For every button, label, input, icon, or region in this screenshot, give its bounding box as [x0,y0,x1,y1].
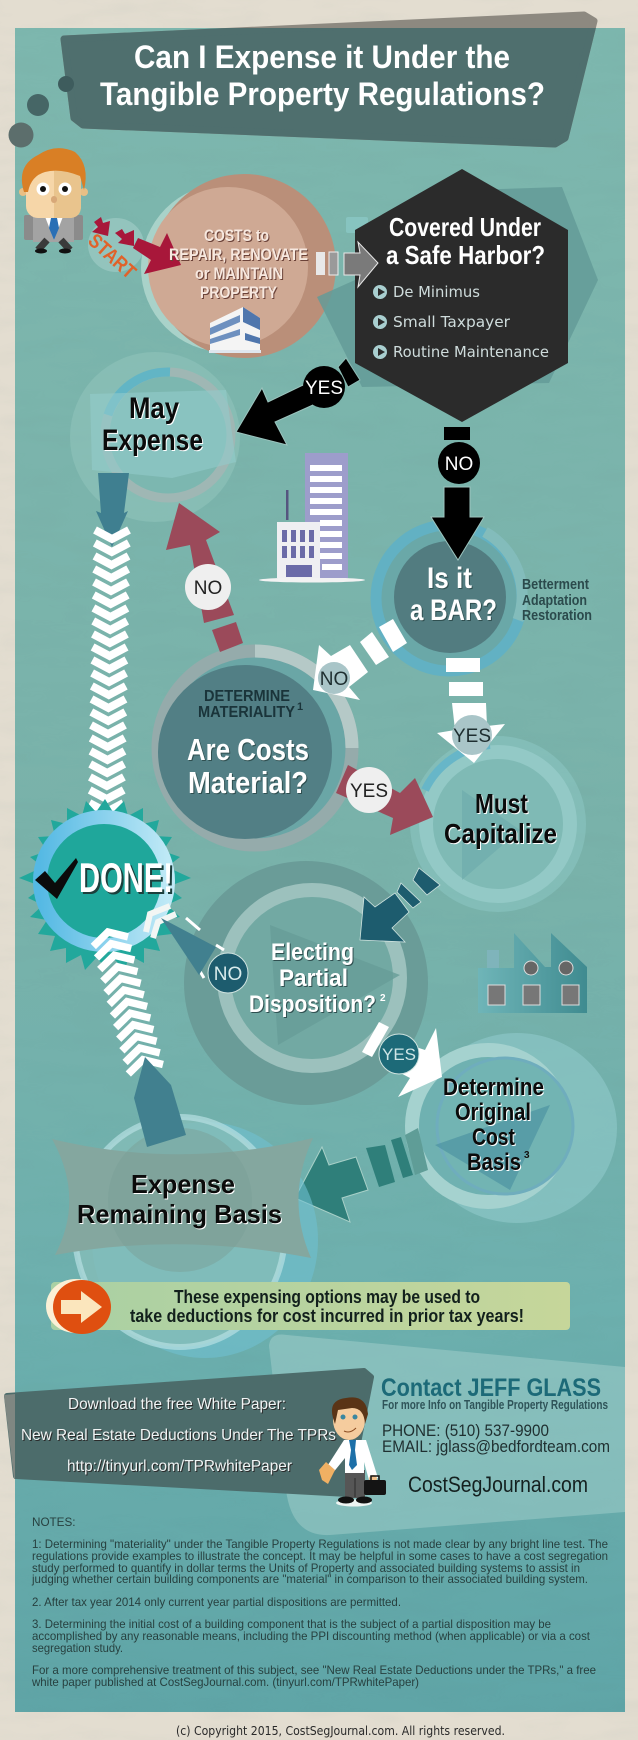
arrow: no from BAR to materiality [313,619,407,700]
arrow: yes from materiality to must capitalize [336,765,433,835]
arrow: no from BAR to materiality: NO [320,669,348,690]
character: businessman [19,148,88,254]
panel: materiality circle: 1 [297,701,303,713]
text: costs to repair [169,226,308,302]
arrow: may expense down to done [89,473,129,812]
icon: factory [478,933,587,1013]
arrow: yes from electing to determine [362,1022,442,1097]
panel: safe harbor hexagon [317,169,598,422]
text block: notes: accomplished by any reasonable means, including the PPI discounting method (when applicable) or via a cost [32,1630,591,1643]
panel: safe harbor hexagon: Covered Under [389,212,541,242]
thought bubbles [8,76,74,148]
text: costs to repair: PROPERTY [200,283,278,302]
arrow: yes from BAR to must capitalize [437,658,505,763]
done badge [19,799,191,970]
text block: notes: study performed to quantify in dollar terms the Units of Property and associated building systems to assist in [32,1562,580,1575]
text: costs to repair: COSTS to [204,226,269,245]
panel: download white paper: Download the free White Paper: [68,1396,286,1413]
safe harbor list: Small Taxpayer [393,313,511,331]
arrow: yes to may expense: YES [305,378,343,399]
arrow: yes from materiality to must capitalize: YES [350,781,388,802]
character: contact man with briefcase [319,1397,386,1506]
panel: electing partial disposition circle: Disposition? [249,991,376,1018]
arrow: expense remaining basis up to done [93,932,186,1147]
panel: download white paper: http://tinyurl.com/TPRwhitePaper [67,1458,293,1475]
panel: may expense circle: May [129,392,179,425]
safe harbor list: De Minimus [393,283,480,301]
panel: costs circle [141,174,336,358]
arrow: no from electing to done [146,906,248,993]
contact details: PHONE: (510) 537-9900 [382,1422,549,1440]
panel: expense remaining basis [52,1117,318,1358]
BAR definition list: Adaptation [522,592,587,609]
arrow: determine to expense remaining basis [295,1128,428,1222]
panel: expense remaining basis: Expense [131,1169,235,1199]
text block: notes: white paper published at CostSegJournal.com. (tinyurl.com/TPRwhitePaper) [31,1676,419,1689]
text block: notes: NOTES: [32,1516,76,1529]
panel: may expense circle: Expense [102,424,203,457]
title banner: Can I Expense it Under the [134,39,510,75]
panel: materiality circle [158,651,352,845]
panel: download white paper: New Real Estate Deductions Under The TPRs [21,1427,336,1444]
text block: notes: 2. After tax year 2014 only current year partial dispositions are permitted. [32,1596,401,1609]
BAR definition list: Betterment [522,576,589,593]
safe harbor list [373,283,549,361]
text block: notes: regulations provide examples to illustrate the concept. It may be helpful in some cases to have a cost segregation [32,1550,608,1563]
panel: determine original cost basis circle: Basis [467,1149,521,1176]
title banner [64,15,594,144]
text block: notes: For a more comprehensive treatment of this subject, see "New Real Estate Deductions under the TPRs," a free [32,1664,596,1677]
title banner: Tangible Property Regulations? [100,76,545,112]
text: costs to repair: REPAIR, RENOVATE [169,245,308,264]
contact details: EMAIL: jglass@bedfordteam.com [382,1438,610,1456]
panel: must capitalize circle [410,736,586,912]
icon: check mark [35,858,78,899]
panel: determine original cost basis circle [412,1033,617,1223]
panel: determine original cost basis circle: Determine [443,1074,544,1101]
panel: download white paper [4,1371,371,1494]
done badge: DONE! [79,854,173,901]
panel: determine original cost basis circle: Original [455,1099,531,1126]
panel: expense remaining basis: Remaining Basis [77,1199,282,1229]
text block: notes: judging whether certain building components are "material" in comparison to their associated building system. [31,1573,588,1586]
arrow: must capitalize to electing [360,868,440,942]
panel: must capitalize circle: Capitalize [444,818,557,849]
panel: determine original cost basis circle: Cost [472,1124,515,1151]
callout: prior tax years: These expensing options may be used to [174,1287,480,1307]
start arrows and label [84,217,181,284]
arrow: yes from electing to determine: YES [382,1045,416,1064]
panel: materiality circle: MATERIALITY [198,704,295,721]
panel: safe harbor hexagon: a Safe Harbor? [386,240,545,270]
panel: electing partial disposition circle: 2 [380,993,386,1004]
panel: must capitalize circle: Must [475,788,528,819]
arrow: yes from BAR to must capitalize: YES [453,726,491,747]
panel: materiality circle: DETERMINE [204,688,290,705]
chevron column [89,530,129,812]
panel: materiality circle: Material? [188,765,308,800]
arrow: costs to safe harbor [316,242,378,287]
callout: prior tax years: take deductions for cost incurred in prior tax years! [130,1306,524,1326]
arrow: yes to may expense [236,358,360,445]
panel: may expense circle [70,352,240,522]
text: costs to repair: or MAINTAIN [195,264,283,283]
panel: is it a BAR circle: a BAR? [410,594,497,627]
arrow: no from materiality to may expense: NO [194,578,222,599]
icon: orange arrow circle [53,1280,111,1334]
text block: notes: 1: Determining "materiality" under the Tangible Property Regulations is not made clear by any bright line test. The [32,1538,608,1551]
icon: office building [209,307,261,353]
callout: prior tax years [46,1279,570,1334]
text block: notes [31,1516,608,1689]
arrow: no from safe harbor [431,427,484,560]
text block: notes: segregation study. [32,1642,123,1655]
safe harbor list: Routine Maintenance [393,343,549,361]
text block: notes: 3. Determining the initial cost of a building component that is the subject of a partial disposition may be [32,1618,551,1631]
arrow: no from safe harbor: NO [445,454,473,475]
panel: determine original cost basis circle: 3 [524,1150,530,1161]
panel: contact background [269,1334,625,1535]
contact details: CostSegJournal.com [408,1472,588,1497]
panel: is it a BAR circle [376,525,522,671]
panel: electing partial disposition circle [184,861,428,1105]
arrow: no from materiality to may expense [166,503,243,652]
contact details: Contact JEFF GLASS [381,1374,601,1402]
start arrows and label: START [84,230,140,284]
BAR definition list [522,576,592,624]
panel: is it a BAR circle: Is it [427,562,472,595]
copyright: (c) Copyright 2015, CostSegJournal.com. All rights reserved. [176,1724,505,1738]
panel: electing partial disposition circle: Partial [279,965,348,992]
arrow: no from electing to done: NO [214,964,242,985]
panel: materiality circle: Are Costs [187,732,309,767]
icon: city buildings [259,453,365,582]
contact details [381,1374,610,1497]
BAR definition list: Restoration [522,607,592,624]
panel: electing partial disposition circle: Electing [271,939,354,966]
